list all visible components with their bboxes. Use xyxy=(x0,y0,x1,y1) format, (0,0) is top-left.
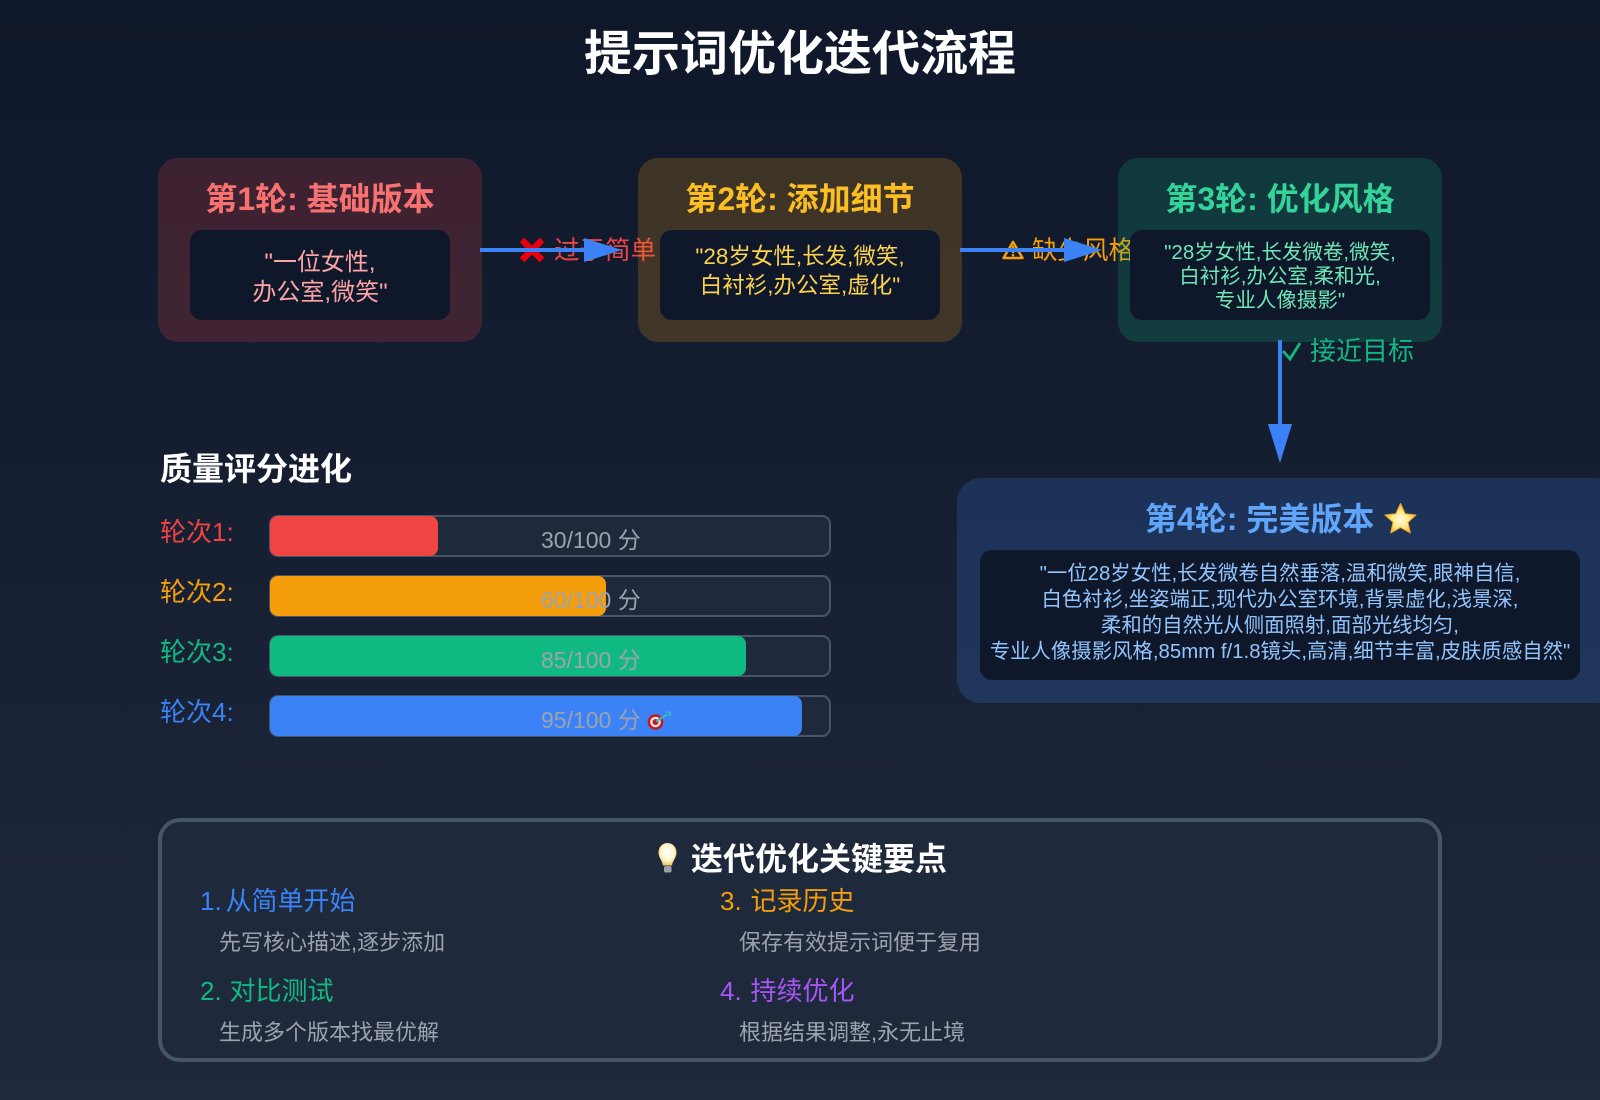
row: round 2 score: 轮次2: xyxy=(160,577,234,607)
row: round 1 score: 轮次1: xyxy=(160,517,234,547)
round 4 prompt box: 柔和的自然光从侧面照射,面部光线均匀, xyxy=(1101,614,1459,637)
round 3 prompt box xyxy=(1130,230,1430,320)
round 3 prompt box: "28岁女性,长发微卷,微笑, xyxy=(1164,241,1396,264)
takeaway 2 xyxy=(200,976,439,1045)
icon: check mark xyxy=(1283,343,1300,359)
row: round 3 score xyxy=(160,636,830,676)
takeaway 4: 根据结果调整,永无止境 xyxy=(739,1020,965,1045)
arrow: round 2 to round 3 xyxy=(960,238,1102,262)
row: round 4 score xyxy=(160,696,830,736)
row: round 3 score: 85/100 分 xyxy=(541,647,641,673)
takeaway 3: 3. xyxy=(720,886,742,916)
section: quality score chart xyxy=(160,451,830,736)
round 2 prompt box: "28岁女性,长发,微笑, xyxy=(695,244,905,269)
row: round 2 score: 60/100 分 xyxy=(541,587,641,613)
round 1 prompt box: 办公室,微笑" xyxy=(252,279,388,306)
panel: round 2 xyxy=(638,158,962,342)
row: round 1 score xyxy=(160,516,830,556)
title: 提示词优化迭代流程 xyxy=(584,28,1016,81)
arrow label: too simple: 过于简单 xyxy=(554,237,656,265)
takeaway 3 xyxy=(720,886,981,955)
round 2 prompt box: 白衬衫,办公室,虚化" xyxy=(700,273,900,298)
arrow: round 1 to round 2 xyxy=(480,238,622,262)
round 4 prompt box: "一位28岁女性,长发微卷自然垂落,温和微笑,眼神自信, xyxy=(1040,562,1520,585)
takeaway 4: 持续优化 xyxy=(750,976,855,1006)
icon: star xyxy=(1385,504,1416,533)
row: round 2 score xyxy=(160,576,830,616)
round 4 prompt box: 专业人像摄影风格,85mm f/1.8镜头,高清,细节丰富,皮肤质感自然" xyxy=(990,640,1570,663)
round 4 prompt box xyxy=(980,550,1580,680)
takeaway 3: 记录历史 xyxy=(750,886,855,916)
panel: key takeaways xyxy=(160,820,1440,1060)
takeaway 4: 4. xyxy=(720,976,742,1006)
round 2 heading: 第2轮: 添加细节 xyxy=(685,181,915,217)
takeaway 1: 从简单开始 xyxy=(226,886,356,916)
arrow label: missing style: 缺少风格 xyxy=(1032,237,1134,265)
round 3 prompt box: 白衬衫,办公室,柔和光, xyxy=(1179,265,1381,288)
takeaway 1 xyxy=(200,886,445,955)
panel: round 4 xyxy=(957,478,1600,703)
icon: warning triangle xyxy=(1004,242,1022,258)
takeaway 4 xyxy=(720,976,965,1045)
takeaway 1: 1. xyxy=(200,886,222,916)
row: round 4 score: 轮次4: xyxy=(160,697,234,727)
takeaway 2: 对比测试 xyxy=(230,976,334,1006)
takeaway 2: 生成多个版本找最优解 xyxy=(219,1020,439,1045)
panel: round 1 xyxy=(158,158,482,342)
row: round 1 score: 30/100 分 xyxy=(541,527,641,553)
takeaway 2: 2. xyxy=(200,976,222,1006)
chart heading: 质量评分进化 xyxy=(160,451,352,487)
arrow: round 3 to round 4 xyxy=(1268,340,1292,463)
panel: round 3 xyxy=(1118,158,1442,342)
arrow label: close to goal: 接近目标 xyxy=(1310,336,1414,366)
takeaway 3: 保存有效提示词便于复用 xyxy=(739,930,981,955)
round 4 heading: 第4轮: 完美版本 xyxy=(1145,501,1374,537)
round 3 prompt box: 专业人像摄影" xyxy=(1215,289,1345,312)
round 1 heading: 第1轮: 基础版本 xyxy=(205,181,435,217)
round 2 prompt box xyxy=(660,230,940,320)
takeaway 1: 先写核心描述,逐步添加 xyxy=(219,930,445,955)
round 3 heading: 第3轮: 优化风格 xyxy=(1165,181,1395,217)
round 1 prompt box: "一位女性, xyxy=(264,249,376,276)
round 1 prompt box xyxy=(190,230,450,320)
icon: red cross xyxy=(522,240,542,260)
row: round 3 score: 轮次3: xyxy=(160,637,234,667)
icon: target with dart xyxy=(648,712,671,730)
icon: light bulb xyxy=(658,843,676,872)
round 4 prompt box: 白色衬衫,坐姿端正,现代办公室环境,背景虚化,浅景深, xyxy=(1042,588,1518,611)
row: round 4 score: 95/100 分 xyxy=(541,707,641,733)
takeaways heading: 迭代优化关键要点 xyxy=(691,841,947,877)
